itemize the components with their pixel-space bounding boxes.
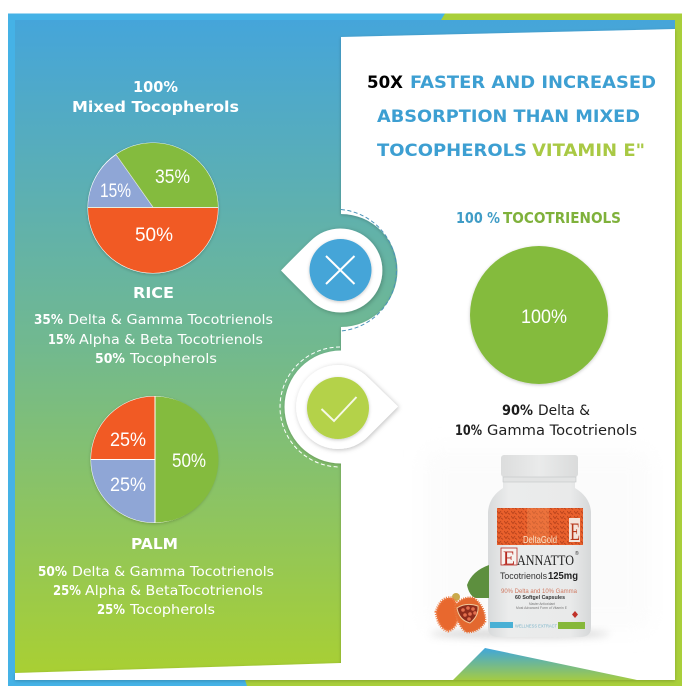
composition caption: Gamma Tocotrienols [487,423,637,439]
product: annatto bottle with fruit: ® [575,550,579,557]
palm composition text: 50% [38,564,67,580]
pie chart: palm [90,396,218,523]
rice composition text: 50% [95,351,125,367]
rice composition text: Alpha & Beta Tocotrienols [79,332,263,348]
rice composition text: 15% [48,332,75,348]
subheading: 100% tocotrienols: 100 % [456,209,500,227]
palm composition text: 25% [53,583,81,599]
product: annatto bottle with fruit: WELLNESS EXTRACT [515,624,557,628]
palm composition text: Tocopherols [129,602,215,618]
pie chart: palm: 25% [110,475,146,496]
palm label: PALM [131,535,178,553]
product: annatto bottle with fruit: ANNATTO [517,553,574,569]
product: annatto bottle with fruit: E [570,519,580,546]
pie chart: palm: 25% [110,430,146,451]
palm composition text: 25% [97,602,125,618]
main headline: 50X [367,73,403,93]
product: annatto bottle with fruit: 60 Softgel Capsules [515,595,565,601]
heading: 100% mixed tocopherols: Mixed Tocopherols [72,98,239,116]
product: annatto bottle with fruit [425,450,650,638]
subheading: 100% tocotrienols: TOCOTRIENOLS [503,209,621,227]
rice composition text: Delta & Gamma Tocotrienols [68,312,273,328]
rice composition text: Tocopherols [129,351,217,367]
pie chart: rice: 15% [100,181,131,202]
pie chart: rice: 50% [135,225,173,246]
pie chart: 100% tocotrienols [470,246,608,384]
product: annatto bottle with fruit: Tocotrienols [500,571,547,581]
cross badge [281,210,396,331]
main headline [367,73,656,161]
product: annatto bottle with fruit: E [503,548,515,570]
palm composition text [38,564,274,618]
product: annatto bottle with fruit: 90% Delta and 10% Gamma [501,588,577,595]
pie chart: rice [88,142,218,274]
palm composition text: Alpha & BetaTocotrienols [85,583,263,599]
rice composition text [34,312,273,367]
pie chart: palm: 50% [172,451,206,472]
heading: 100% mixed tocopherols: 100% [133,78,178,96]
main headline: ABSORPTION THAN MIXED [377,107,640,127]
product: annatto bottle with fruit: Most Advanced Form of Vitamin E [516,606,568,610]
check badge [280,347,398,467]
accent: bottom triangle [453,648,637,680]
product: annatto bottle with fruit: DeltaGold [523,535,557,546]
pie chart: 100% tocotrienols: 100% [521,307,567,328]
rice label: RICE [133,284,174,302]
composition caption: 10% [455,423,482,439]
composition caption [455,403,637,439]
main headline: FASTER AND INCREASED [410,73,656,93]
composition caption: 90% [502,403,533,419]
product: annatto bottle with fruit: Master Antioxidant [529,602,555,606]
main headline: VITAMIN E" [532,141,645,161]
subheading: 100% tocotrienols [456,209,621,227]
rice composition text: 35% [34,312,63,328]
heading: 100% mixed tocopherols [72,78,239,116]
composition caption: Delta & [538,403,590,419]
palm composition text: Delta & Gamma Tocotrienols [72,564,274,580]
main headline: TOCOPHEROLS [377,141,527,161]
pie chart: rice: 35% [155,167,190,188]
product: annatto bottle with fruit: 125mg [548,571,578,582]
